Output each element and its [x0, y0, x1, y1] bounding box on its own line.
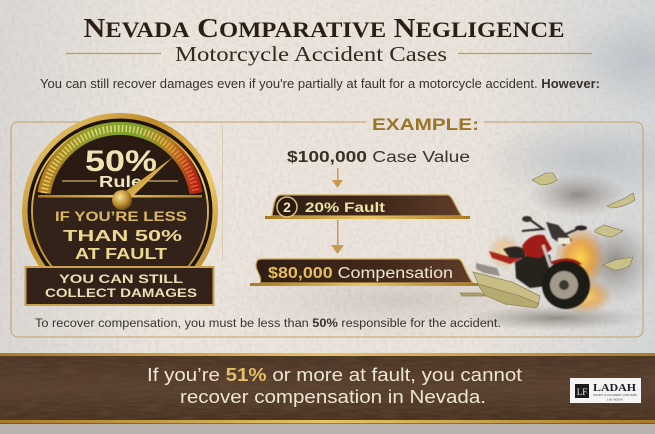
handlebars and mirrors — [522, 219, 580, 234]
subtitle: Motorcycle Accident Cases — [175, 42, 447, 66]
plate: 20% fault — [265, 195, 470, 219]
gauge colored arc — [44, 128, 196, 193]
banner: you can still collect damages: COLLECT DAMAGES — [45, 286, 197, 300]
logo: Ladah: INJURY & ACCIDENT LAWYERS — [593, 393, 637, 397]
tank — [522, 235, 552, 258]
gauge divider — [38, 195, 202, 198]
logo: Ladah: LAS VEGAS — [607, 398, 623, 402]
arrow: to compensation — [331, 220, 344, 254]
fender — [550, 258, 582, 270]
banner: you can still collect damages: YOU CAN STILL — [59, 272, 183, 286]
arrow: to fault — [332, 168, 343, 188]
logo: Ladah: LF — [577, 387, 587, 397]
tail — [489, 251, 522, 264]
fork — [543, 245, 556, 283]
engine — [515, 252, 555, 288]
intro text: You can still recover damages even if you're partially at fault for a motorcycle accident. However: — [40, 77, 600, 91]
logo: Ladah — [570, 378, 641, 403]
plate: 20% fault: 20% Fault — [305, 199, 385, 215]
illustration: motorcycle with flying money — [460, 173, 655, 331]
gauge needle — [112, 157, 173, 210]
gauge text: AT FAULT — [75, 246, 167, 263]
gauge ticks — [44, 128, 196, 193]
footnote: To recover compensation, you must be less than 50% responsible for the accident. — [35, 318, 501, 330]
exhaust — [476, 263, 500, 276]
smoke and fire — [465, 173, 655, 331]
text: case value: $100,000 Case Value — [287, 149, 470, 166]
warning text — [147, 365, 522, 407]
panel: example frame — [11, 122, 643, 337]
banner: you can still collect damages — [26, 267, 214, 305]
gauge text: IF YOU’RE LESS — [55, 208, 187, 224]
motorcycle — [476, 216, 590, 309]
gauge heading: 50%: 50% — [85, 145, 157, 178]
gauge heading: Rule — [62, 174, 178, 191]
seat — [503, 246, 526, 258]
panel: 50% rule gauge — [22, 113, 218, 309]
gauge heading: Rule: Rule — [99, 174, 142, 191]
logo: Ladah: LADAH — [593, 383, 636, 394]
title: NEVADA COMPARATIVE NEGLIGENCE — [84, 13, 564, 43]
plate: 20% fault: 2 — [283, 199, 291, 215]
gauge text — [55, 208, 187, 263]
fairing and headlight — [546, 222, 572, 246]
plate: compensation — [250, 259, 478, 286]
warning text: If you’re 51% or more at fault, you cannot — [147, 365, 522, 385]
heading: example: EXAMPLE: — [372, 116, 479, 134]
warning text: recover compensation in Nevada. — [180, 387, 486, 407]
panel: bottom warning band — [0, 353, 655, 424]
money stack — [460, 272, 540, 308]
front wheel — [542, 261, 590, 309]
flying bills — [532, 173, 635, 270]
plate: compensation: $80,000 Compensation — [268, 265, 453, 282]
background: lower strip — [0, 424, 655, 434]
gauge text: THAN 50% — [63, 228, 182, 245]
background: clouds — [210, 10, 655, 340]
